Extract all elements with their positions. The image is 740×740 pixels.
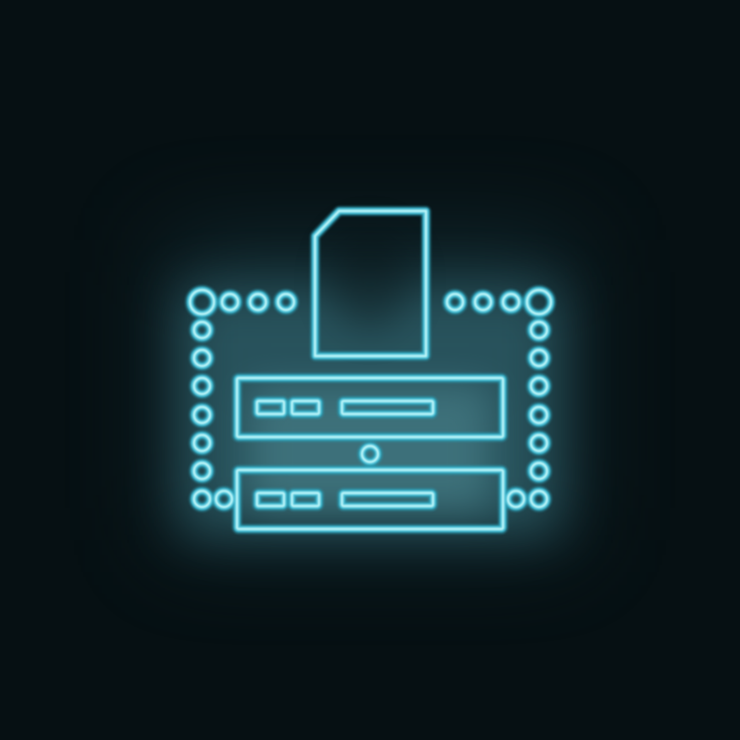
neon core xyxy=(190,211,551,529)
neon outer halo xyxy=(190,211,551,529)
neon tube xyxy=(190,211,551,529)
ambient glow xyxy=(170,230,570,540)
